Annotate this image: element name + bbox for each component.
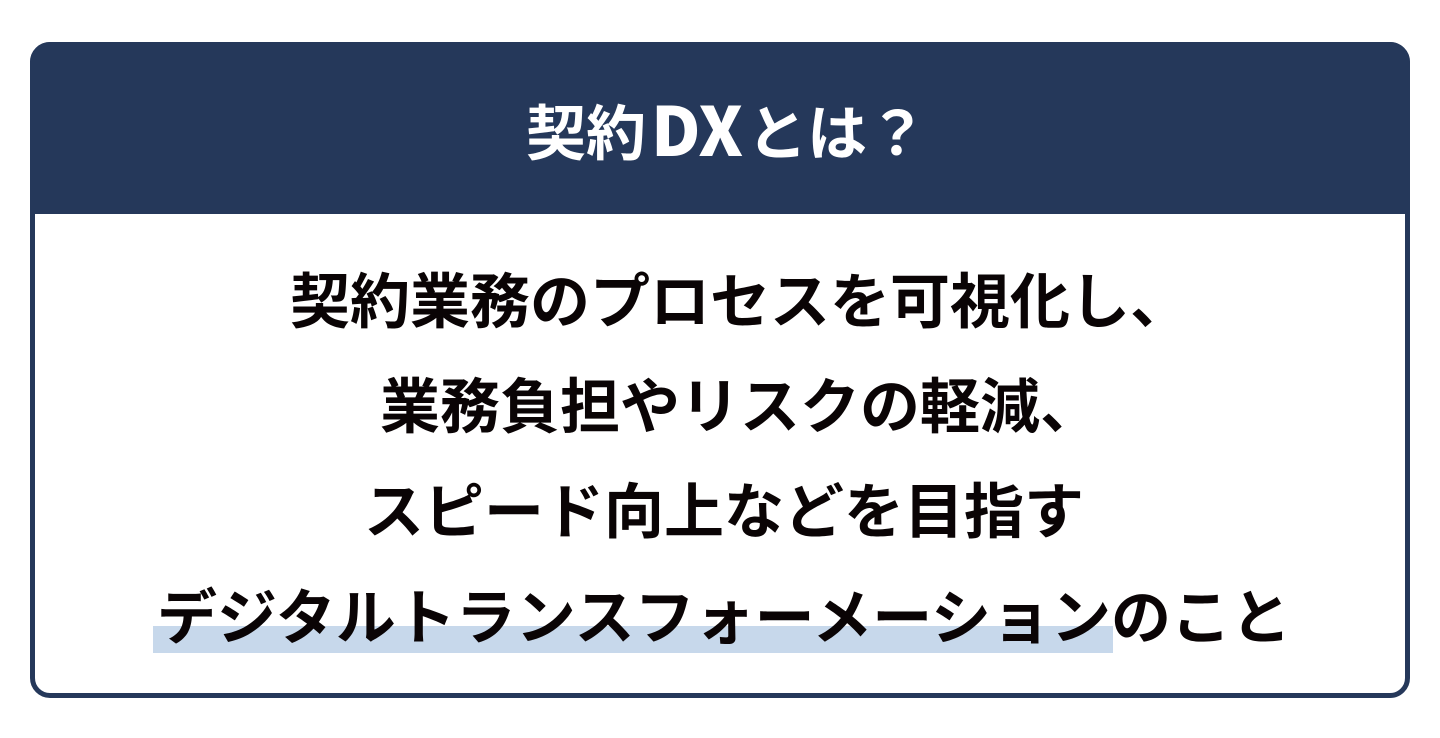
text: line 3: スピード向上などを目指す bbox=[364, 464, 1084, 551]
text: line 2: 業務負担やリスクの軽減、 bbox=[380, 359, 1100, 446]
header band bbox=[30, 42, 1410, 214]
title: 契約DXとは？ bbox=[526, 77, 927, 176]
text: line 4: デジタルトランスフォーメーションのこと bbox=[157, 570, 1291, 657]
text: line 1: 契約業務のプロセスを可視化し、 bbox=[290, 254, 1190, 341]
highlight under term bbox=[153, 626, 1113, 653]
